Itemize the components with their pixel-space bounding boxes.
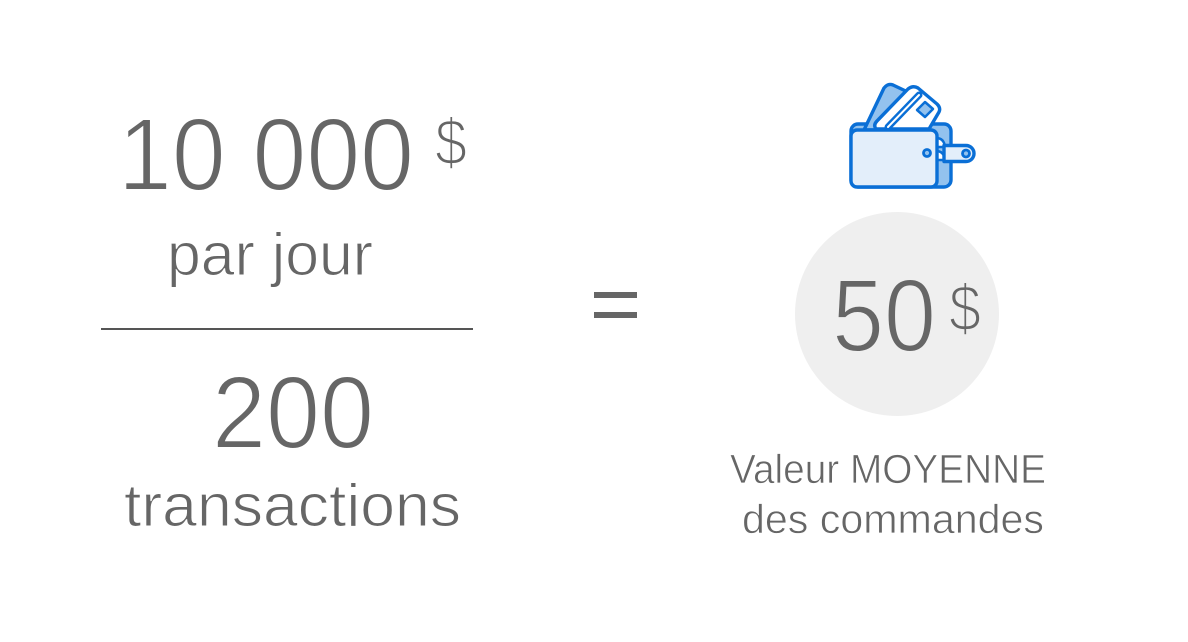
blue card [864, 84, 912, 130]
result value 50: 50 [832, 258, 936, 373]
denominator: transactions [124, 355, 461, 539]
clasp button [962, 150, 970, 157]
clasp [944, 146, 974, 162]
result circle [795, 212, 999, 416]
card chip [917, 102, 933, 117]
caption line 1: Valeur MOYENNE [730, 446, 1046, 492]
label par jour: par jour [167, 221, 373, 288]
equals sign [594, 292, 637, 318]
caption line 2: des commandes [742, 496, 1044, 542]
result dollar sign: $ [949, 271, 981, 345]
card stripes [888, 95, 919, 127]
caption [730, 446, 1046, 542]
numerator: daily revenue [118, 97, 467, 288]
wallet pockets [936, 138, 945, 160]
wallet front [851, 130, 937, 187]
wallet back [851, 124, 951, 187]
card stripe highlight [888, 95, 919, 127]
fraction line [101, 328, 473, 330]
front button [924, 150, 930, 156]
amount 200: 200 [212, 355, 374, 470]
white card [875, 87, 940, 129]
dollar sign: $ [435, 105, 467, 179]
amount 10 000: 10 000 [118, 97, 414, 212]
label transactions: transactions [124, 472, 461, 539]
icon: wallet with cards [851, 84, 974, 187]
